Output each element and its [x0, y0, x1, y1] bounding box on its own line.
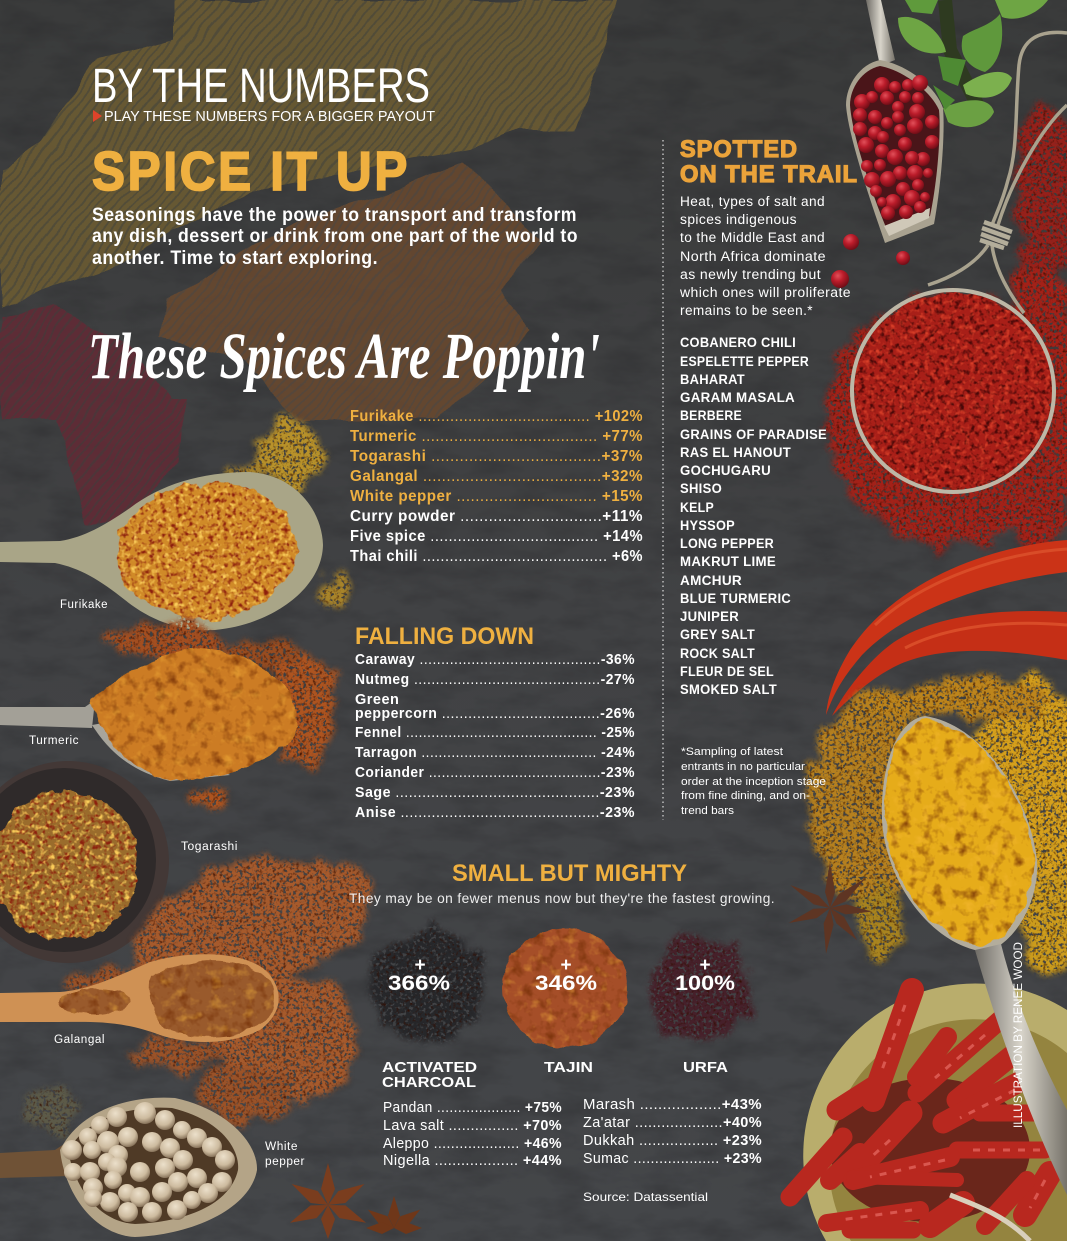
table: growth right column — [583, 1096, 762, 1167]
footnote: trend bars — [681, 805, 735, 817]
icon: turmeric spoon — [882, 716, 1037, 952]
icon: tajin powder mound — [503, 928, 627, 1048]
heading: spotted on the trail: ON THE TRAIL — [680, 161, 858, 188]
list: trending spices: KELP — [680, 500, 714, 515]
red powder around large spoon — [825, 105, 1067, 550]
footnote: *Sampling of latest — [681, 746, 783, 758]
list: trending spices: HYSSOP — [680, 518, 735, 533]
text block: trail description — [679, 194, 851, 318]
text block: trail description: to the Middle East and — [680, 230, 825, 245]
table: growth right column: Za'atar ....................+40% — [583, 1114, 762, 1131]
script heading: These Spices Are Poppin' — [88, 320, 600, 393]
table: falling spices: Anise .............................................-23% — [355, 805, 635, 821]
masthead: BY THE NUMBERS — [92, 60, 430, 113]
text block: trail description: Heat, types of salt and — [680, 194, 825, 209]
table: rising spices: Galangal ......................................+32% — [350, 468, 643, 485]
labels: fastest growing spices: TAJIN — [544, 1059, 593, 1076]
table: rising spices: Togarashi ....................................+37% — [350, 448, 643, 465]
icon: turmeric spoon — [0, 648, 298, 781]
stat: urfa: + — [699, 955, 711, 976]
list: trending spices: FLEUR DE SEL — [680, 664, 774, 679]
text block: trail description: spices indigenous — [680, 212, 797, 227]
world map backdrop — [0, 0, 619, 525]
title: SPICE IT UP — [92, 140, 410, 202]
footnote: order at the inception stage — [681, 776, 826, 788]
table: falling spices: Caraway ..........................................-36% — [355, 652, 635, 668]
table: growth left column: Aleppo .................... +46% — [383, 1135, 562, 1152]
table: rising spices: Furikake ...................................... +102% — [350, 408, 643, 425]
intro text — [92, 205, 578, 269]
stat: tajin — [535, 955, 597, 995]
icon: wire spoon of red powder — [852, 32, 1067, 492]
stat: activated charcoal: 366% — [388, 972, 450, 995]
source: Source: Datassential — [583, 1190, 708, 1204]
text block: trail description: which ones will proliferate — [679, 285, 851, 300]
table: rising spices: Turmeric ...................................... +77% — [350, 428, 643, 445]
heading: spotted on the trail — [680, 136, 858, 188]
stat: tajin: + — [560, 955, 572, 976]
labels: fastest growing spices: URFA — [683, 1059, 728, 1076]
table: falling spices: peppercorn ....................................-26% — [355, 706, 635, 722]
table: falling spices: Green — [355, 692, 399, 708]
list: trending spices: LONG PEPPER — [680, 536, 774, 551]
table: falling spices: Fennel ............................................. -25% — [355, 725, 635, 741]
table: growth right column: Dukkah .................. +23% — [583, 1132, 762, 1149]
stat: urfa — [675, 955, 735, 995]
table: rising spices: White pepper .............................. +15% — [350, 488, 643, 505]
icon: galangal wooden spoon — [0, 954, 279, 1042]
icon: scoop of red peppercorns — [846, 0, 944, 243]
list: trending spices: SMOKED SALT — [680, 682, 777, 697]
masthead: PLAY THESE NUMBERS FOR A BIGGER PAYOUT — [104, 108, 435, 125]
subheading: They may be on fewer menus now but they're the fastest growing. — [349, 891, 775, 906]
icon: togarashi bowl — [0, 761, 169, 963]
table: growth left column: Pandan .................... +75% — [383, 1099, 562, 1116]
icon: bowl of dried red chilies — [790, 983, 1067, 1241]
reddish-brown powder, lower left — [58, 828, 385, 1123]
list: trending spices: JUNIPER — [680, 609, 739, 624]
spice captions: White — [265, 1141, 298, 1153]
labels: fastest growing spices: CHARCOAL — [382, 1074, 476, 1091]
icon: chili peppers — [826, 540, 1067, 716]
list: trending spices: MAKRUT LIME — [680, 554, 776, 569]
table: falling spices: Sage ..............................................-23% — [355, 785, 635, 801]
illustration credit: ILLUSTRATION BY RENEE WOOD — [1013, 942, 1025, 1128]
stat: tajin: 346% — [535, 972, 597, 995]
icon: star anise bottom — [287, 1163, 424, 1239]
spice captions: Furikake — [60, 599, 108, 611]
spice captions — [29, 599, 305, 1168]
icon: herb leaves — [898, 0, 1048, 127]
heading: spotted on the trail: SPOTTED — [680, 136, 798, 163]
list: trending spices: BAHARAT — [680, 372, 745, 387]
list: trending spices: GOCHUGARU — [680, 463, 771, 478]
table: rising spices — [350, 408, 643, 565]
spice captions: Togarashi — [181, 841, 238, 853]
list: trending spices: GRAINS OF PARADISE — [680, 427, 827, 442]
list: trending spices: GREY SALT — [680, 627, 755, 642]
intro text: Seasonings have the power to transport and transform — [92, 205, 577, 226]
stat: urfa: 100% — [675, 972, 735, 995]
list: trending spices: BLUE TURMERIC — [680, 591, 791, 606]
labels: fastest growing spices: ACTIVATED — [382, 1059, 477, 1076]
table: falling spices — [355, 652, 635, 821]
table: rising spices: Thai chili ......................................... +6% — [350, 548, 643, 565]
icon: white pepper spoon — [0, 1098, 257, 1237]
icon: urfa powder mound — [650, 936, 750, 1040]
table: falling spices: Coriander ........................................-23% — [355, 765, 635, 781]
table: growth left column: Nigella ................... +44% — [383, 1152, 562, 1169]
icon: charcoal powder mound — [370, 930, 486, 1040]
icon: star anise right — [787, 862, 872, 954]
list: trending spices — [680, 335, 827, 697]
text block: trail description: North Africa dominate — [680, 249, 826, 264]
stat: activated charcoal — [388, 955, 450, 995]
list: trending spices: COBANERO CHILI — [680, 335, 796, 350]
list: trending spices: AMCHUR — [680, 573, 742, 588]
turmeric spoon powder spill — [103, 622, 336, 809]
icon: loose peppercorns — [831, 234, 910, 288]
footnote: from fine dining, and on- — [681, 790, 810, 802]
list: trending spices: ESPELETTE PEPPER — [680, 354, 809, 369]
list: trending spices: RAS EL HANOUT — [680, 445, 791, 460]
icon: furikake scatter — [225, 421, 349, 608]
list: trending spices: BERBERE — [680, 408, 742, 423]
spice captions: Turmeric — [29, 735, 79, 747]
icon: herb bits near white pepper spoon — [22, 1088, 78, 1132]
dotted divider — [662, 140, 664, 820]
table: growth left column — [383, 1099, 562, 1169]
table: rising spices: Five spice ..................................... +14% — [350, 528, 643, 545]
spice captions: Galangal — [54, 1034, 105, 1046]
heading: small but mighty: SMALL BUT MIGHTY — [452, 860, 687, 887]
table: growth right column: Marash ..................+43% — [583, 1096, 762, 1113]
table: growth left column: Lava salt ................ +70% — [383, 1117, 562, 1134]
footnote: entrants in no particular — [681, 761, 805, 773]
icon: furikake spoon — [0, 472, 323, 630]
yellow turmeric powder — [808, 675, 1067, 975]
list: trending spices: GARAM MASALA — [680, 390, 795, 405]
labels: fastest growing spices — [382, 1059, 728, 1091]
intro text: another. Time to start exploring. — [92, 248, 378, 269]
list: trending spices: ROCK SALT — [680, 646, 755, 661]
table: falling spices: Nutmeg ...........................................-27% — [355, 672, 635, 688]
table: rising spices: Curry powder ..............................+11% — [350, 508, 643, 525]
spice captions: pepper — [265, 1156, 305, 1168]
masthead — [92, 60, 435, 125]
table: growth right column: Sumac .................... +23% — [583, 1150, 762, 1167]
intro text: any dish, dessert or drink from one part of the world to — [92, 226, 578, 247]
text block: trail description: as newly trending but — [680, 267, 821, 282]
table: falling spices: Tarragon ......................................... -24% — [355, 745, 635, 761]
text block: trail description: remains to be seen.* — [680, 303, 813, 318]
icon: spoon handle over bowl — [975, 944, 1067, 1195]
heading: falling down: FALLING DOWN — [355, 623, 534, 650]
list: trending spices: SHISO — [680, 481, 722, 496]
footnote — [681, 746, 826, 817]
stat: activated charcoal: + — [414, 955, 426, 976]
